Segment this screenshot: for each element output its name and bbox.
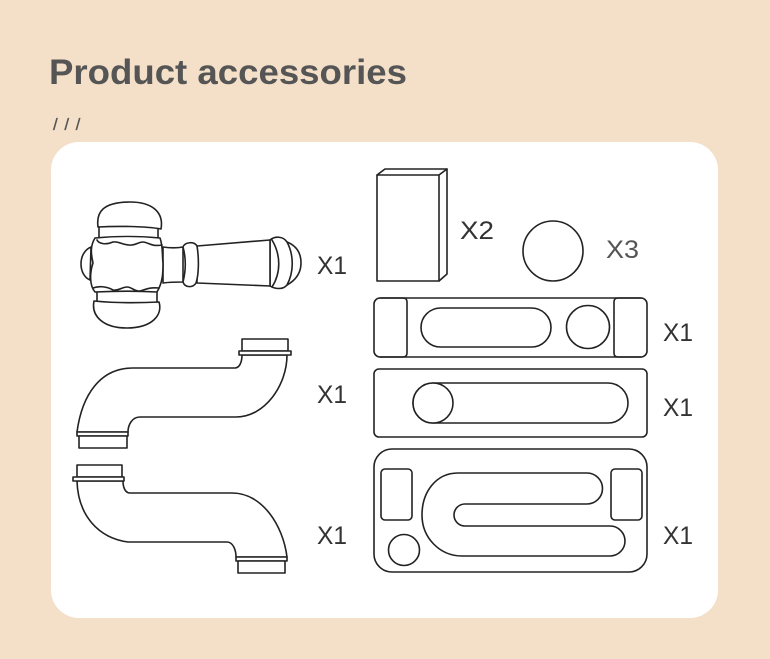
label: snake tray quantity: X1 xyxy=(663,522,693,550)
label: long tray quantity: X1 xyxy=(663,394,693,422)
icon: upper curved pipe xyxy=(77,339,291,448)
icon: long track tray xyxy=(374,369,647,437)
icon: lower curved pipe xyxy=(73,465,287,573)
decorative slashes mark: /// xyxy=(53,115,87,134)
label: ball quantity: X3 xyxy=(606,236,639,264)
title: Product accessories xyxy=(49,53,407,92)
icon: short track tray xyxy=(374,298,647,357)
icon: toy hammer xyxy=(81,202,301,328)
icon: snake track tray xyxy=(374,449,647,572)
label: block quantity: X2 xyxy=(460,217,494,245)
icon: ball xyxy=(523,221,583,281)
label: hammer quantity: X1 xyxy=(317,252,347,280)
label: short tray quantity: X1 xyxy=(663,319,693,347)
icon: rectangular block xyxy=(377,169,447,281)
label: lower pipe quantity: X1 xyxy=(317,522,347,550)
label: upper pipe quantity: X1 xyxy=(317,381,347,409)
panel: accessories card xyxy=(51,142,718,618)
